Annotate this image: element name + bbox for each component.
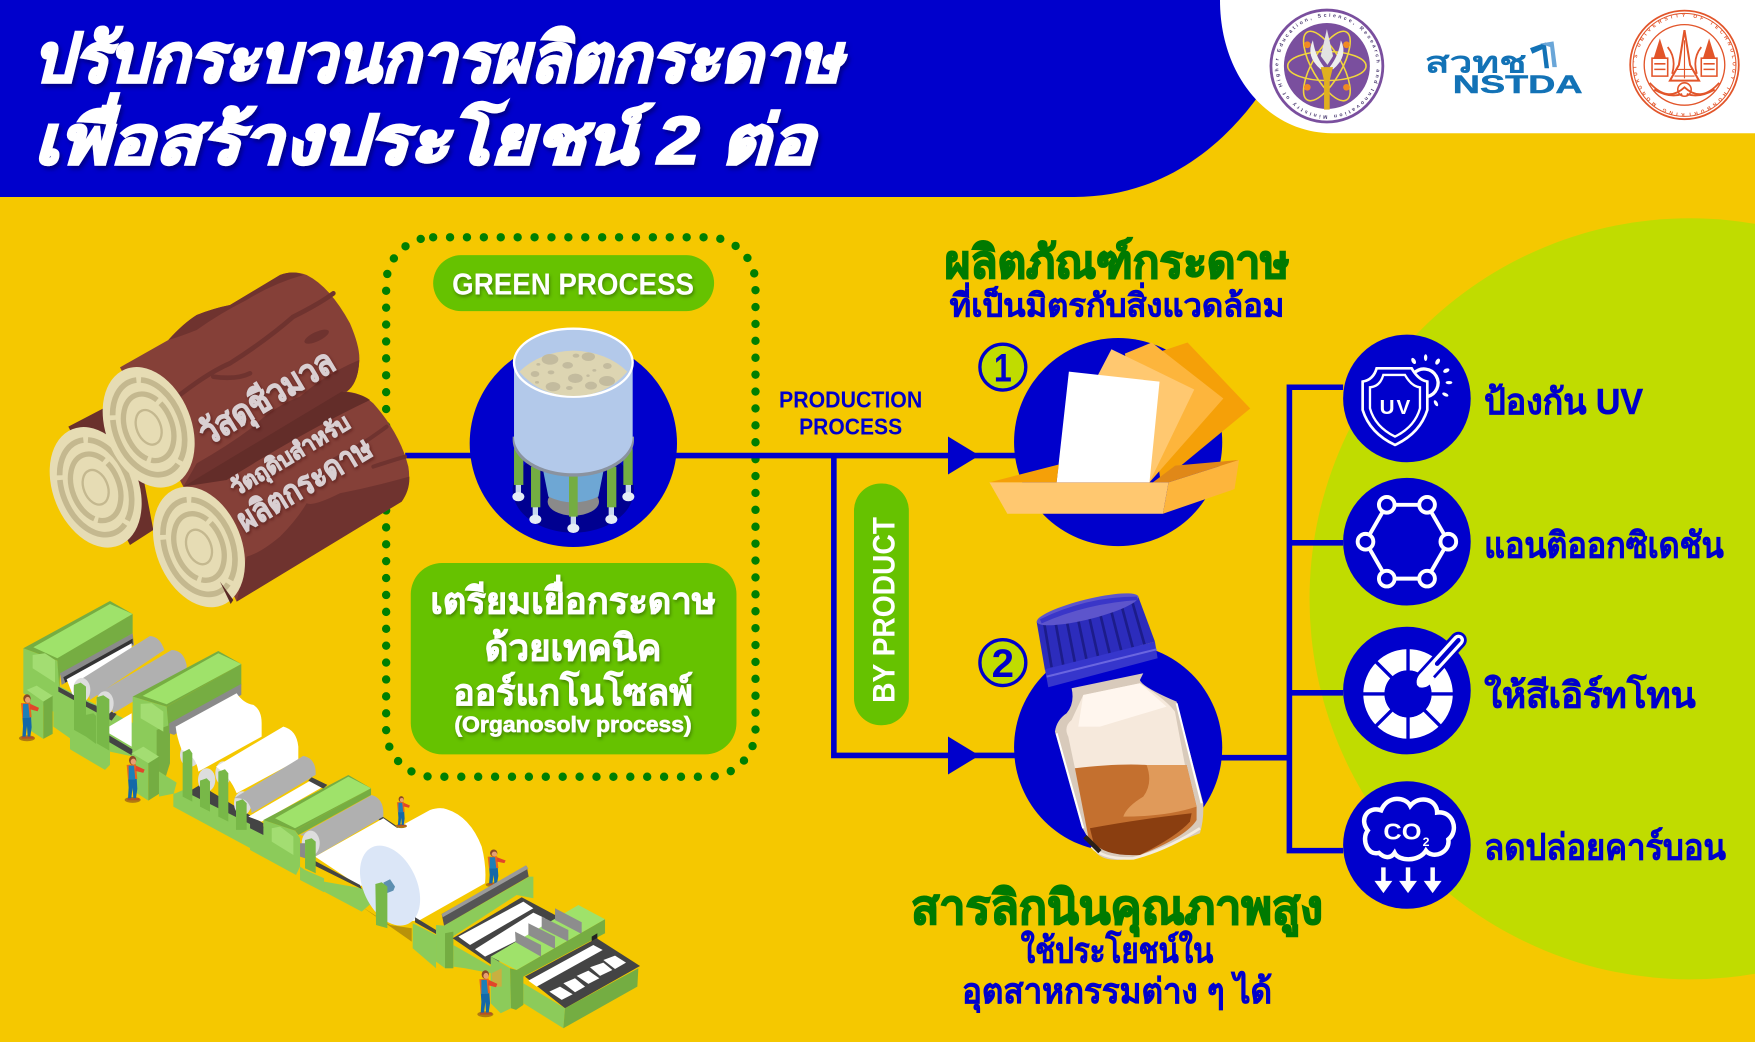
label: production process: PRODUCTION [779,386,922,412]
label: production process [779,386,922,439]
number badge 2 [980,640,1026,686]
green box: prepare pulp: ออร์แกโนโซลพ์ [453,670,693,713]
number badge 1: 1 [994,346,1012,391]
pill: by product: BY PRODUCT [866,517,901,703]
label: production process: PROCESS [799,413,902,439]
heading: lignin: อุตสาหกรรมต่าง ๆ ได้ [962,970,1272,1013]
number badge 2: 2 [992,641,1014,686]
product 1: paper icon [989,338,1250,546]
dotted green process frame [386,237,756,777]
log labels: ผลิตกระดาษ [230,429,379,538]
tank icon [470,329,677,547]
third press and paper roll [250,775,485,942]
pill: green process: GREEN PROCESS [452,268,694,301]
label: carbon reduction: ลดปล่อยคาร์บอน [1484,827,1726,868]
logo: NSTDA: NSTDA [1453,72,1583,99]
machine: rear sections [19,601,327,852]
second press [132,651,327,852]
benefit: antioxidant [1343,478,1471,606]
machine: front sections [250,775,640,1028]
label: earth tone: ให้สีเอิร์ทโทน [1484,673,1696,715]
heading: lignin: ใช้ประโยชน์ใน [1021,930,1214,971]
glass bottle [1055,673,1203,860]
workers: front [396,796,497,1017]
title [32,22,847,178]
green box: prepare pulp [411,563,736,754]
logo: ministry: Ministry of Higher Education, Science, Research and Innovation [1274,13,1380,119]
benefit: UV protection [1343,335,1471,462]
green box: prepare pulp: เตรียมเยื่อกระดาษ [430,574,716,621]
logo: NSTDA [1425,41,1583,99]
finishing end [413,850,640,1028]
first press [23,601,187,770]
heading: lignin: สารลิกนินคุณภาพสูง [911,880,1323,937]
pill: green process [433,255,714,311]
header band [0,0,1259,197]
worker: behind frame [486,850,506,887]
heading: paper product [945,238,1289,324]
log labels [192,342,379,538]
label: antioxidant: แอนติออกซิเดชัน [1484,525,1724,565]
benefit: UV protection: UV [1380,396,1411,419]
flow lines and arrows [405,387,1343,851]
green box: prepare pulp: ด้วยเทคนิค [485,627,661,668]
log labels: วัสดุชีวมวล [192,342,343,455]
number badge 1 [980,344,1026,391]
product 2: bottle icon [1014,587,1222,860]
log: back left [33,408,159,561]
green backdrop circle [1310,218,1755,979]
logo: NSTDA: สวทช [1425,48,1527,80]
benefit: carbon reduction: CO [1383,818,1421,844]
pill: by product [854,484,909,725]
logo: university: KING MONGKUT'S UNIVERSITY OF TECHNOLOGY THONBURI [1634,14,1736,116]
log: top [86,272,359,501]
heading: paper product: ที่เป็นมิตรกับสิ่งแวดล้อม [950,283,1284,324]
logo panel [1220,0,1755,133]
benefit: carbon reduction: 2 [1423,835,1430,849]
title: เพื่อสร้างประโยชน์ 2 ต่อ [34,92,819,178]
logs illustration [33,272,409,621]
log labels: วัตถุดิบสำหรับ [225,409,355,502]
paper machine illustration [19,601,640,1028]
label: UV: ป้องกัน UV [1484,382,1643,422]
benefit: earth tone colour [1343,627,1471,754]
title: ปรับกระบวนการผลิตกระดาษ [32,22,847,97]
benefit: carbon reduction [1343,781,1471,909]
bottle cap [1034,587,1158,687]
workers: rear [19,694,145,803]
heading: paper product: ผลิตภัณฑ์กระดาษ [945,238,1289,288]
log: lower right [136,392,409,621]
heading: lignin [911,880,1323,1013]
green box: prepare pulp: (Organosolv process) [454,712,692,737]
